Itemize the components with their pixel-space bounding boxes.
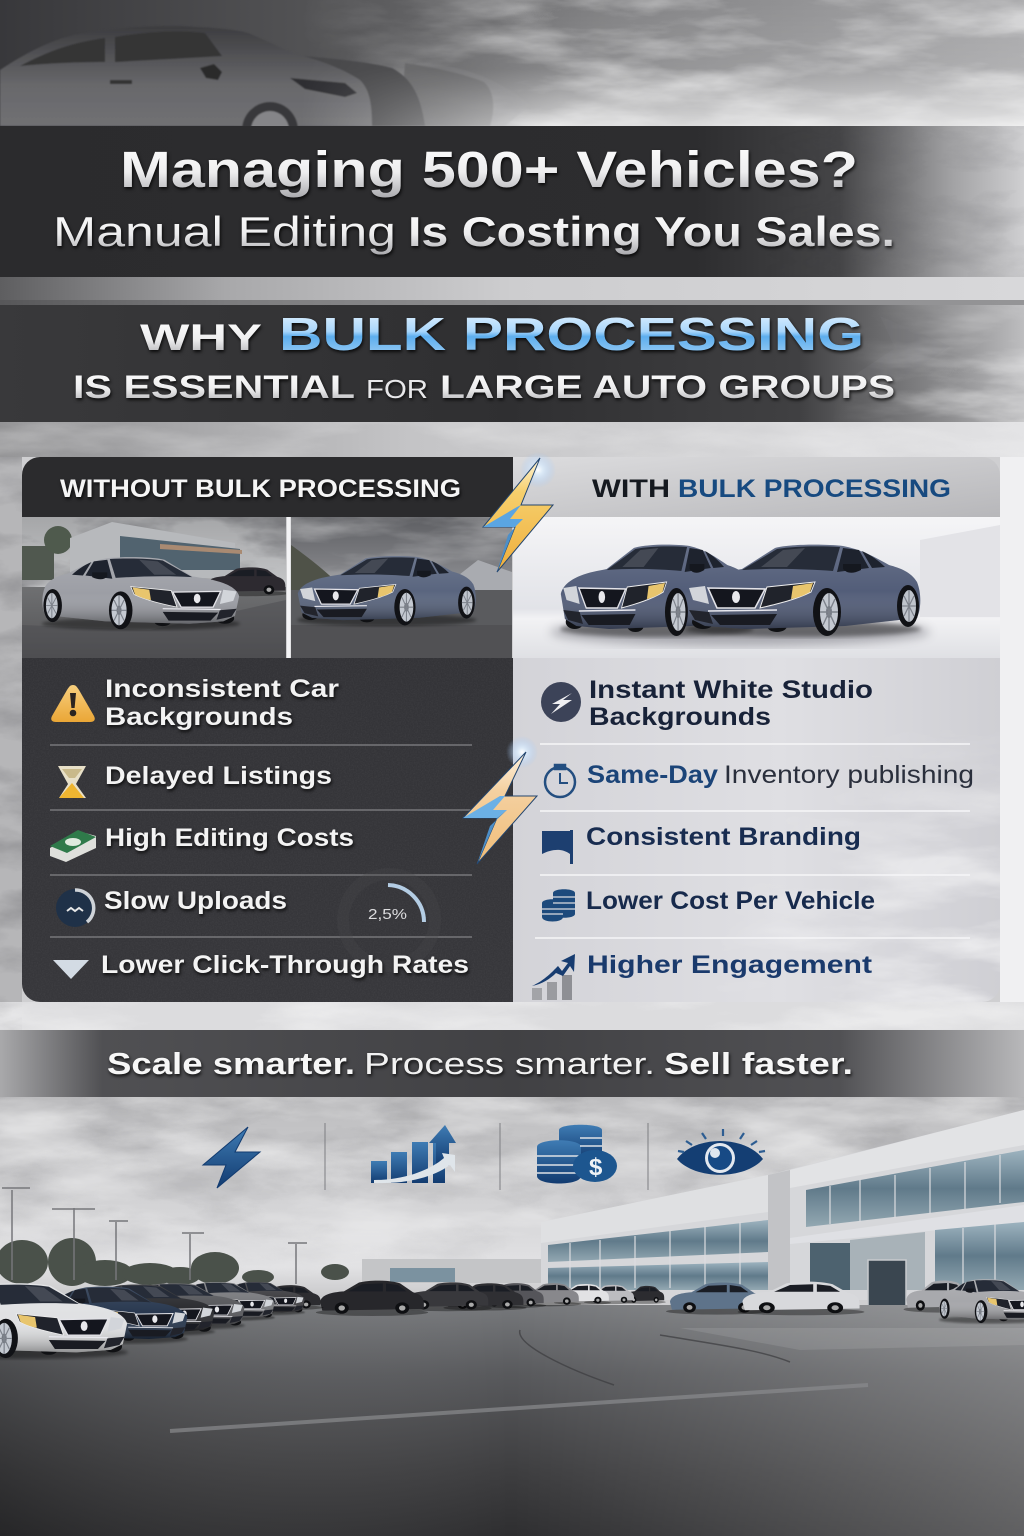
- icon: down triangle: [53, 960, 89, 979]
- column heading: without: WITHOUT BULK PROCESSING: [60, 475, 461, 503]
- icon: coins: [542, 889, 575, 922]
- comparison panel: [22, 452, 1024, 1002]
- title line 2: [53, 208, 895, 255]
- icon: warning: [51, 685, 95, 722]
- icon: hourglass: [58, 766, 86, 798]
- hero: faded car row at top: [0, 0, 1024, 126]
- icon: coins and dollar: $: [589, 1154, 603, 1181]
- icon: coins and dollar: [537, 1125, 617, 1184]
- panel: without bulk processing: [22, 457, 513, 1002]
- treeline and lamps: [0, 1188, 349, 1286]
- back building: [362, 1259, 548, 1283]
- item: lower click-through rates: Lower Click-Through Rates: [101, 951, 469, 979]
- heading line 2: [73, 369, 895, 405]
- icon: rising bars: [371, 1125, 456, 1183]
- item: higher engagement: Higher Engagement: [587, 951, 873, 979]
- item: same-day inventory publishing: Same-Day: [587, 761, 718, 789]
- icon: eye: [677, 1129, 765, 1175]
- item: instant white studio backgrounds: [589, 676, 873, 731]
- main building: [541, 1110, 1024, 1306]
- item: same-day inventory publishing: Inventory publishing: [724, 761, 974, 789]
- gauge: 2.5% arc: 2,5%: [368, 906, 407, 923]
- heading line 1: WHY: [140, 317, 262, 358]
- parked cars: far row: [316, 1279, 1024, 1324]
- column heading: with: WITH: [592, 475, 670, 503]
- list: benefits: [532, 676, 974, 1000]
- item: delayed listings: Delayed Listings: [105, 762, 332, 790]
- banner: section heading: [0, 300, 1024, 422]
- heading line 2: FOR: [366, 374, 428, 404]
- scene: dealership lot: [0, 1097, 1024, 1536]
- panel: with bulk processing: [513, 457, 1024, 1002]
- banner: tagline: Sell faster.: [664, 1046, 853, 1081]
- item: lower cost per vehicle: Lower Cost Per Vehicle: [586, 887, 875, 915]
- item: slow uploads: Slow Uploads: [104, 887, 287, 915]
- item: inconsistent car backgrounds: Inconsistent Car: [105, 675, 339, 703]
- banner: tagline: [0, 1030, 1024, 1097]
- icon: growth arrow: [532, 954, 575, 1000]
- divider bolt: top: [483, 452, 556, 572]
- item: instant white studio backgrounds: Instant White Studio: [589, 676, 873, 704]
- icon: lightning bolt: [203, 1127, 260, 1188]
- icon: stopwatch: [545, 765, 575, 797]
- item: high editing costs: High Editing Costs: [105, 824, 354, 852]
- icon: bolt circle: [541, 682, 581, 722]
- title line 2: Manual Editing: [53, 208, 396, 255]
- divider bolt: middle: [463, 736, 538, 864]
- column heading: with: [592, 475, 951, 503]
- heading line 1: [140, 308, 864, 360]
- photo: twin cars in white studio: [513, 517, 1000, 658]
- item: same-day inventory publishing: [587, 761, 974, 789]
- strip clouds: [0, 1002, 1024, 1030]
- column heading: with: BULK PROCESSING: [678, 475, 951, 503]
- icon: gauge: [56, 889, 94, 927]
- item: inconsistent car backgrounds: Backgrounds: [105, 703, 293, 731]
- heading line 2: IS ESSENTIAL: [73, 369, 355, 405]
- list: problems: [50, 675, 472, 979]
- heading line 1: BULK PROCESSING: [279, 308, 864, 360]
- parked cars: left row: [0, 1282, 323, 1359]
- gauge: 2.5% arc: [343, 874, 435, 966]
- banner: tagline: Scale smarter.: [107, 1046, 355, 1081]
- item: inconsistent car backgrounds: [105, 675, 339, 731]
- banner: tagline: Process smarter.: [364, 1046, 655, 1081]
- icon: cash stack: [50, 830, 96, 862]
- photo: silver car at dealership: [22, 517, 289, 658]
- divider between photos: [287, 517, 290, 658]
- title line 1: Managing 500+ Vehicles?: [120, 141, 858, 198]
- divider band: [0, 277, 1024, 305]
- photo: blue car on lot: [291, 517, 512, 658]
- heading line 2: LARGE AUTO GROUPS: [440, 369, 895, 405]
- pavement: [0, 1305, 1024, 1536]
- icon row: [203, 1123, 765, 1190]
- sky: [0, 1097, 1024, 1297]
- banner: main title: [0, 126, 1024, 277]
- item: consistent branding: Consistent Branding: [586, 823, 861, 851]
- title line 2: Is Costing You Sales.: [408, 208, 895, 255]
- icon: flag: [542, 830, 573, 864]
- item: instant white studio backgrounds: Backgrounds: [589, 703, 771, 731]
